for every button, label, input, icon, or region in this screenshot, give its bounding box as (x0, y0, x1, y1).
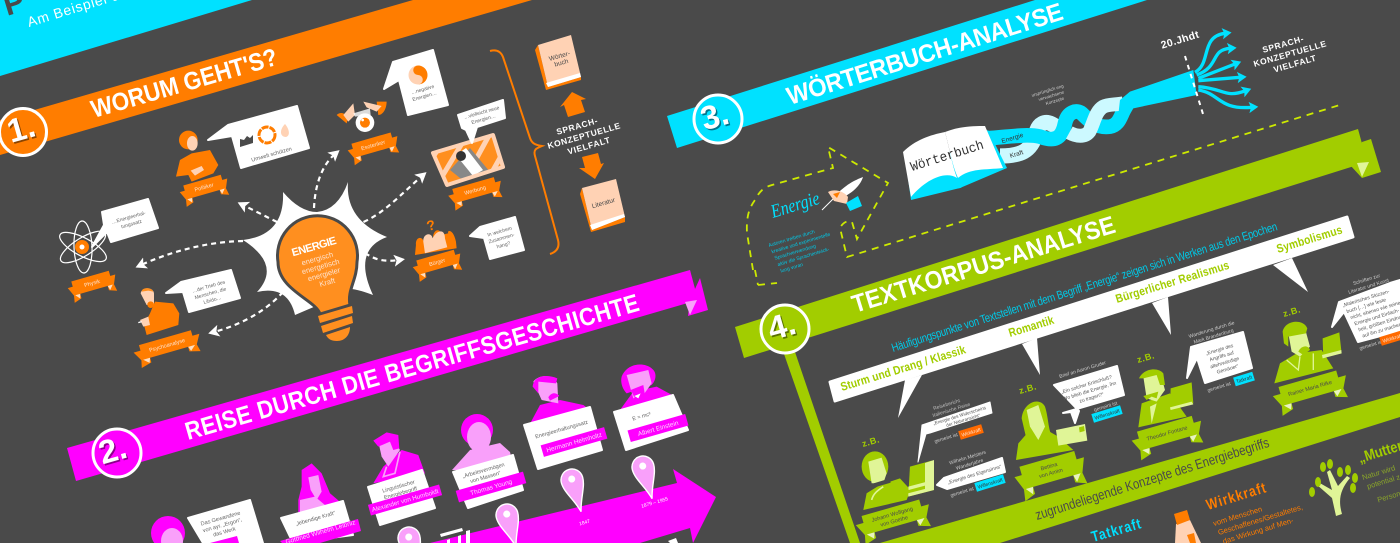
banner: psychoanalyse (132, 328, 204, 369)
person: young: Thomas Young (469, 479, 513, 497)
panel: section 4 textkorpus analyse (735, 129, 1400, 543)
quote: wanderung: Tatkraft (1236, 375, 1254, 385)
label: sprachkonzeptuelle vielfalt right: VIELFALT (1272, 53, 1318, 75)
concept: wirkkraft: Geschaffenes/Gestaltetes, (1217, 502, 1304, 537)
timeline pins (395, 453, 663, 543)
bubble: libido: …der Trieb des (191, 279, 226, 295)
panel: section 1 worum geht's (0, 0, 625, 369)
quote: wilhelm meisters wanderjahre: „Energie des Eigensinns“ (947, 464, 1003, 486)
ribbon labels: Kraft (1009, 149, 1024, 160)
concept: mutterkraft: Natur wird (1361, 463, 1396, 482)
author: bettina von arnim: z.B. (1018, 381, 1038, 396)
concept: wirkkraft: Wirkkraft (1204, 479, 1268, 513)
figure: psychoanalyse (138, 288, 179, 335)
quote: italienische reise: „Energie des Widerscheins (933, 405, 987, 426)
bubble: negative energien: Energien… (412, 90, 438, 103)
bubble: zusammenhang (470, 217, 524, 259)
section 1 heading: WORUM GEHT'S? (88, 43, 281, 124)
bubble: neue energien: …vielleicht neue (463, 105, 500, 121)
author: goethe: von Goethe (880, 515, 909, 529)
author: rilke (1271, 304, 1352, 417)
section 1 banner (0, 0, 532, 155)
quote: brief an aaron gruder: Wo blieb die Energie, ihn (1062, 380, 1117, 402)
quote: wilhelm meisters wanderjahre: Willenskraft (977, 477, 1004, 491)
open book: Wörterbuch (909, 139, 986, 176)
section 4 banner (735, 129, 1381, 358)
epochs speech band (830, 217, 1353, 418)
quote: italienische reise: Wirkkraft (961, 427, 982, 439)
open book (903, 126, 1007, 200)
bubble: zusammenhang: hang? (496, 241, 511, 250)
badge 3: 3. (696, 94, 733, 137)
text: autoren: Sprachverwendung (774, 243, 817, 262)
quote: wanderung (1187, 320, 1255, 394)
quote: brief an aaron gruder (1054, 360, 1124, 423)
badge 2: 2. (94, 428, 131, 471)
person: ergon: das Werk (213, 526, 237, 539)
banner: physik: Physik (84, 279, 101, 289)
bubble: libido (166, 270, 240, 312)
vertical frame line (784, 352, 860, 543)
bubble: negative energien: …negative (410, 84, 435, 96)
quote: brief an aaron gruder: Willenskraft (1094, 408, 1121, 422)
label: sprachkonzeptuelle vielfalt right: SPRACH- (1261, 33, 1305, 55)
badge 1: 1. (3, 107, 39, 150)
author: bettina von arnim: von Arnim (1039, 467, 1064, 480)
bubble: energieerhaltungssatz (92, 199, 158, 247)
quote: wanderung: Mark Brandenburg (1193, 328, 1235, 346)
banner: physik (66, 269, 120, 304)
section 3 banner (667, 0, 1147, 148)
person: einstein (614, 365, 688, 450)
person: helmholtz: Hermann Helmholtz (546, 432, 603, 454)
book: literatur: Literatur (591, 197, 617, 210)
icon: hand with feather (822, 177, 863, 211)
person: humboldt: Energiebegriff (383, 486, 418, 501)
section 4 heading: TEXTKORPUS-ANALYSE (849, 211, 1119, 319)
quote: schriften zur literatur: gemeint ist (1359, 339, 1384, 352)
figure: physik atom (56, 221, 110, 273)
bubble: negative energien (384, 50, 448, 115)
author: goethe (854, 434, 935, 543)
person: young: „Arbeitsvermögen (462, 462, 505, 480)
curly brace (490, 50, 559, 254)
note: verwachsene konzepte: ursprünglich eng (1031, 83, 1065, 98)
ribbon labels (1001, 132, 1025, 160)
bubble: zusammenhang: In welchem (487, 226, 513, 238)
energy light bulb: ENERGIE (290, 235, 338, 259)
intertwined ribbons and spreading arrows (987, 33, 1252, 156)
quote: wanderung: Gemäuer“ (1216, 363, 1240, 376)
quote: wilhelm meisters wanderjahre: gemeint ist (950, 486, 975, 499)
figure: buerger group (415, 216, 457, 255)
person: leibniz (280, 463, 361, 543)
badge 1 (0, 107, 46, 156)
advertising image (430, 133, 505, 187)
quote: brief an aaron gruder: gemeint ist (1093, 400, 1119, 413)
figure: buerger group: ? (425, 216, 437, 234)
quote: schriften zur literatur: Energie und Einfach- (1354, 308, 1400, 327)
banner: politiker: Politiker (194, 182, 215, 194)
bubble: energieerhaltungssatz: tungssatz (120, 219, 143, 230)
quote: wilhelm meisters wanderjahre: Wanderjahre (955, 458, 984, 472)
concepts bar: zugrundeliegende Konzepte des Energiebegriffs (1033, 434, 1271, 523)
bubble: libido: Libido… (203, 295, 222, 306)
quote: wilhelm meisters wanderjahre (925, 449, 1006, 499)
epochs speech band: Bürgerlicher Realismus (1114, 259, 1231, 306)
author: theodor fontane: Theodor Fontane (1146, 425, 1188, 443)
energy light bulb: energieler (307, 265, 342, 283)
quote: wanderung: Angriffs auf (1209, 350, 1235, 363)
icon: bottle (1174, 510, 1201, 543)
concept: mutterkraft (1356, 436, 1400, 507)
bubble: umwelt schuetzen: Umwelt schützen (251, 146, 293, 164)
quote: schriften zur literatur: Literatur und Kunst (1348, 278, 1390, 296)
book: woerterbuch (535, 35, 581, 90)
person: humboldt (368, 432, 442, 525)
section 2 heading: REISE DURCH DIE BEGRIFFSGESCHICHTE (182, 289, 642, 445)
label: sprachkonzeptuelle vielfalt: SPRACH- (555, 115, 599, 137)
bubble: zusammenhang: Zusammen- (488, 232, 516, 245)
person: humboldt: Alexander von Humboldt (371, 488, 440, 514)
label: sprachkonzeptuelle vielfalt right: KONZEPTUELLE (1252, 38, 1328, 69)
book: woerterbuch: Wörter- (548, 50, 571, 63)
book: literatur (580, 179, 625, 232)
icon: tree (1309, 459, 1358, 516)
banner: psychoanalyse: Psychoanalyse (149, 338, 186, 354)
timeline years: 1879 – 1955 (641, 496, 669, 510)
badge 3 (694, 94, 742, 143)
banner: buerger (411, 248, 465, 283)
figure: politiker (176, 131, 218, 182)
icon: white machinery (440, 528, 678, 543)
text: autoren: kreative und experimentelle (771, 232, 831, 255)
handwritten word energie: Energie (768, 188, 822, 223)
person: young (452, 414, 526, 508)
author: rilke: z.B. (1282, 304, 1302, 319)
bubble: umwelt schuetzen (208, 106, 309, 168)
badge 1: 1. (4, 108, 41, 151)
note: verwachsene konzepte: verwachsene (1038, 89, 1065, 102)
quote: wilhelm meisters wanderjahre: Wilhelm Meisters (949, 449, 987, 466)
person: einstein: E = mc² (632, 411, 652, 423)
quote: wanderung: Wanderung durch die (1188, 320, 1236, 340)
quote: brief an aaron gruder: Brief an Aaron Gruder (1059, 360, 1107, 380)
quote: wanderung: „Energie des (1205, 343, 1235, 357)
banner: werbung (447, 176, 505, 211)
quote: brief an aaron gruder: „Ein solcher Entschluß? (1061, 374, 1113, 396)
energy light bulb (243, 182, 387, 341)
quote: schriften zur literatur: buch […] wie feste (1346, 297, 1387, 315)
epochs speech band: Symbolismus (1275, 224, 1344, 256)
energy light bulb: energetisch (301, 257, 340, 276)
concepts bar (880, 393, 1400, 543)
banner: politiker (178, 173, 232, 208)
note: verwachsene konzepte: Konzepte (1045, 96, 1065, 106)
bubble: neue energien (458, 100, 505, 143)
concept: wirkkraft (1204, 479, 1307, 543)
banner: buerger: Bürger (429, 258, 446, 268)
person: ergon: von ayr. „Ergon“, (202, 517, 243, 534)
author: theodor fontane: z.B. (1136, 350, 1156, 365)
quote: schriften zur literatur: Schriften zur (1352, 273, 1381, 287)
timeline years: 1847 (579, 519, 591, 527)
quote: schriften zur literatur (1332, 271, 1400, 352)
author: goethe: z.B. (861, 434, 881, 449)
banner: esoteriker: Esoteriker (361, 140, 386, 152)
quote: brief an aaron gruder: zu tragen?“ (1079, 391, 1105, 405)
timeline arrow (430, 469, 716, 543)
quote: italienische reise: gemeint ist (934, 432, 959, 445)
text: autoren: lung voran (780, 262, 804, 275)
section 2 banner (67, 270, 708, 481)
bubble: libido: Menschen, die (194, 286, 227, 301)
badge 4: 4. (763, 304, 800, 347)
concept: wirkkraft: vom Menschen (1212, 504, 1263, 528)
figure: esoteriker (337, 102, 387, 132)
book: woerterbuch: buch (554, 58, 570, 69)
quote: schriften zur literatur: nicht, ebenso wie seine (1350, 300, 1400, 321)
label: sprachkonzeptuelle vielfalt: VIELFALT (566, 135, 612, 157)
bubble: energieerhaltungssatz: …Energieerhal- (111, 210, 147, 226)
energy light bulb: Kraft (318, 276, 337, 289)
quote: italienische reise (918, 396, 992, 462)
banner: esoteriker (346, 131, 402, 166)
arrow down (579, 153, 604, 179)
person: ergon: Das Gewandene (200, 511, 241, 528)
epochs speech band: Sturm und Drang / Klassik (839, 343, 968, 394)
badge 2: 2. (96, 430, 132, 473)
person: humboldt: Linguistischer (382, 479, 416, 495)
badge 4 (761, 304, 809, 353)
quote: italienische reise: Italienische Reise (932, 402, 971, 419)
epochs speech band: Romantik (1007, 314, 1056, 340)
person: helmholtz: Energieerhaltungssatz (535, 420, 589, 440)
ribbon labels: Energie (1001, 132, 1025, 145)
quote: schriften zur literatur: „Malerisches Skizzen- (1342, 289, 1391, 309)
author: bettina von arnim: Bettina (1040, 462, 1059, 472)
text: autoren: Autoren treiben durch (768, 229, 816, 249)
arrow up (560, 92, 586, 117)
person: helmholtz (524, 376, 607, 469)
quote: italienische reise: der Naturansicht“ (946, 413, 981, 428)
label: 20 jhdt: 20.Jhdt (1159, 29, 1201, 52)
dashed yellow arrow path (747, 104, 1343, 285)
energy light bulb: energisch (300, 250, 334, 267)
section 3 heading: WÖRTERBUCH-ANALYSE (784, 0, 1067, 111)
person: leibniz: „lebendige Kraft“ (295, 511, 336, 528)
panel: section 3 woerterbuch analyse (667, 0, 1343, 285)
text: autoren: aktiv die Sprachentwick- (777, 247, 830, 268)
author: bettina von arnim (1012, 381, 1091, 502)
quote: wanderung: altehrwürdige (1210, 356, 1240, 370)
banner: werbung: Werbung (464, 185, 487, 197)
author: rilke: Rainer Maria Rilke (1288, 380, 1333, 398)
person: einstein: Albert Einstein (637, 420, 680, 438)
badge 3: 3. (698, 96, 734, 139)
intro sentence: Häufigungspunkte von Textstellen mit dem Begriff „Energie“ zeigen sich in Werken aus den Epochen (890, 220, 1279, 355)
badge 4: 4. (765, 306, 801, 349)
label: sprachkonzeptuelle vielfalt: KONZEPTUELLE (546, 120, 622, 151)
person: young: von Massen“ (470, 471, 502, 485)
author: goethe: Johann Wolfgang (871, 506, 914, 524)
panel: section 2 begriffsgeschichte (67, 270, 716, 543)
quote: italienische reise: Reisebericht (933, 398, 961, 412)
timeline years (579, 496, 669, 527)
header band with title (0, 0, 252, 76)
dashed arrows from the bulb (141, 154, 422, 332)
author: theodor fontane (1130, 350, 1207, 461)
bubble: neue energien: Energien… (471, 113, 497, 126)
quote: wanderung: gemeint ist (1207, 381, 1232, 394)
badge 2 (93, 428, 141, 477)
person: ergon (151, 500, 263, 543)
